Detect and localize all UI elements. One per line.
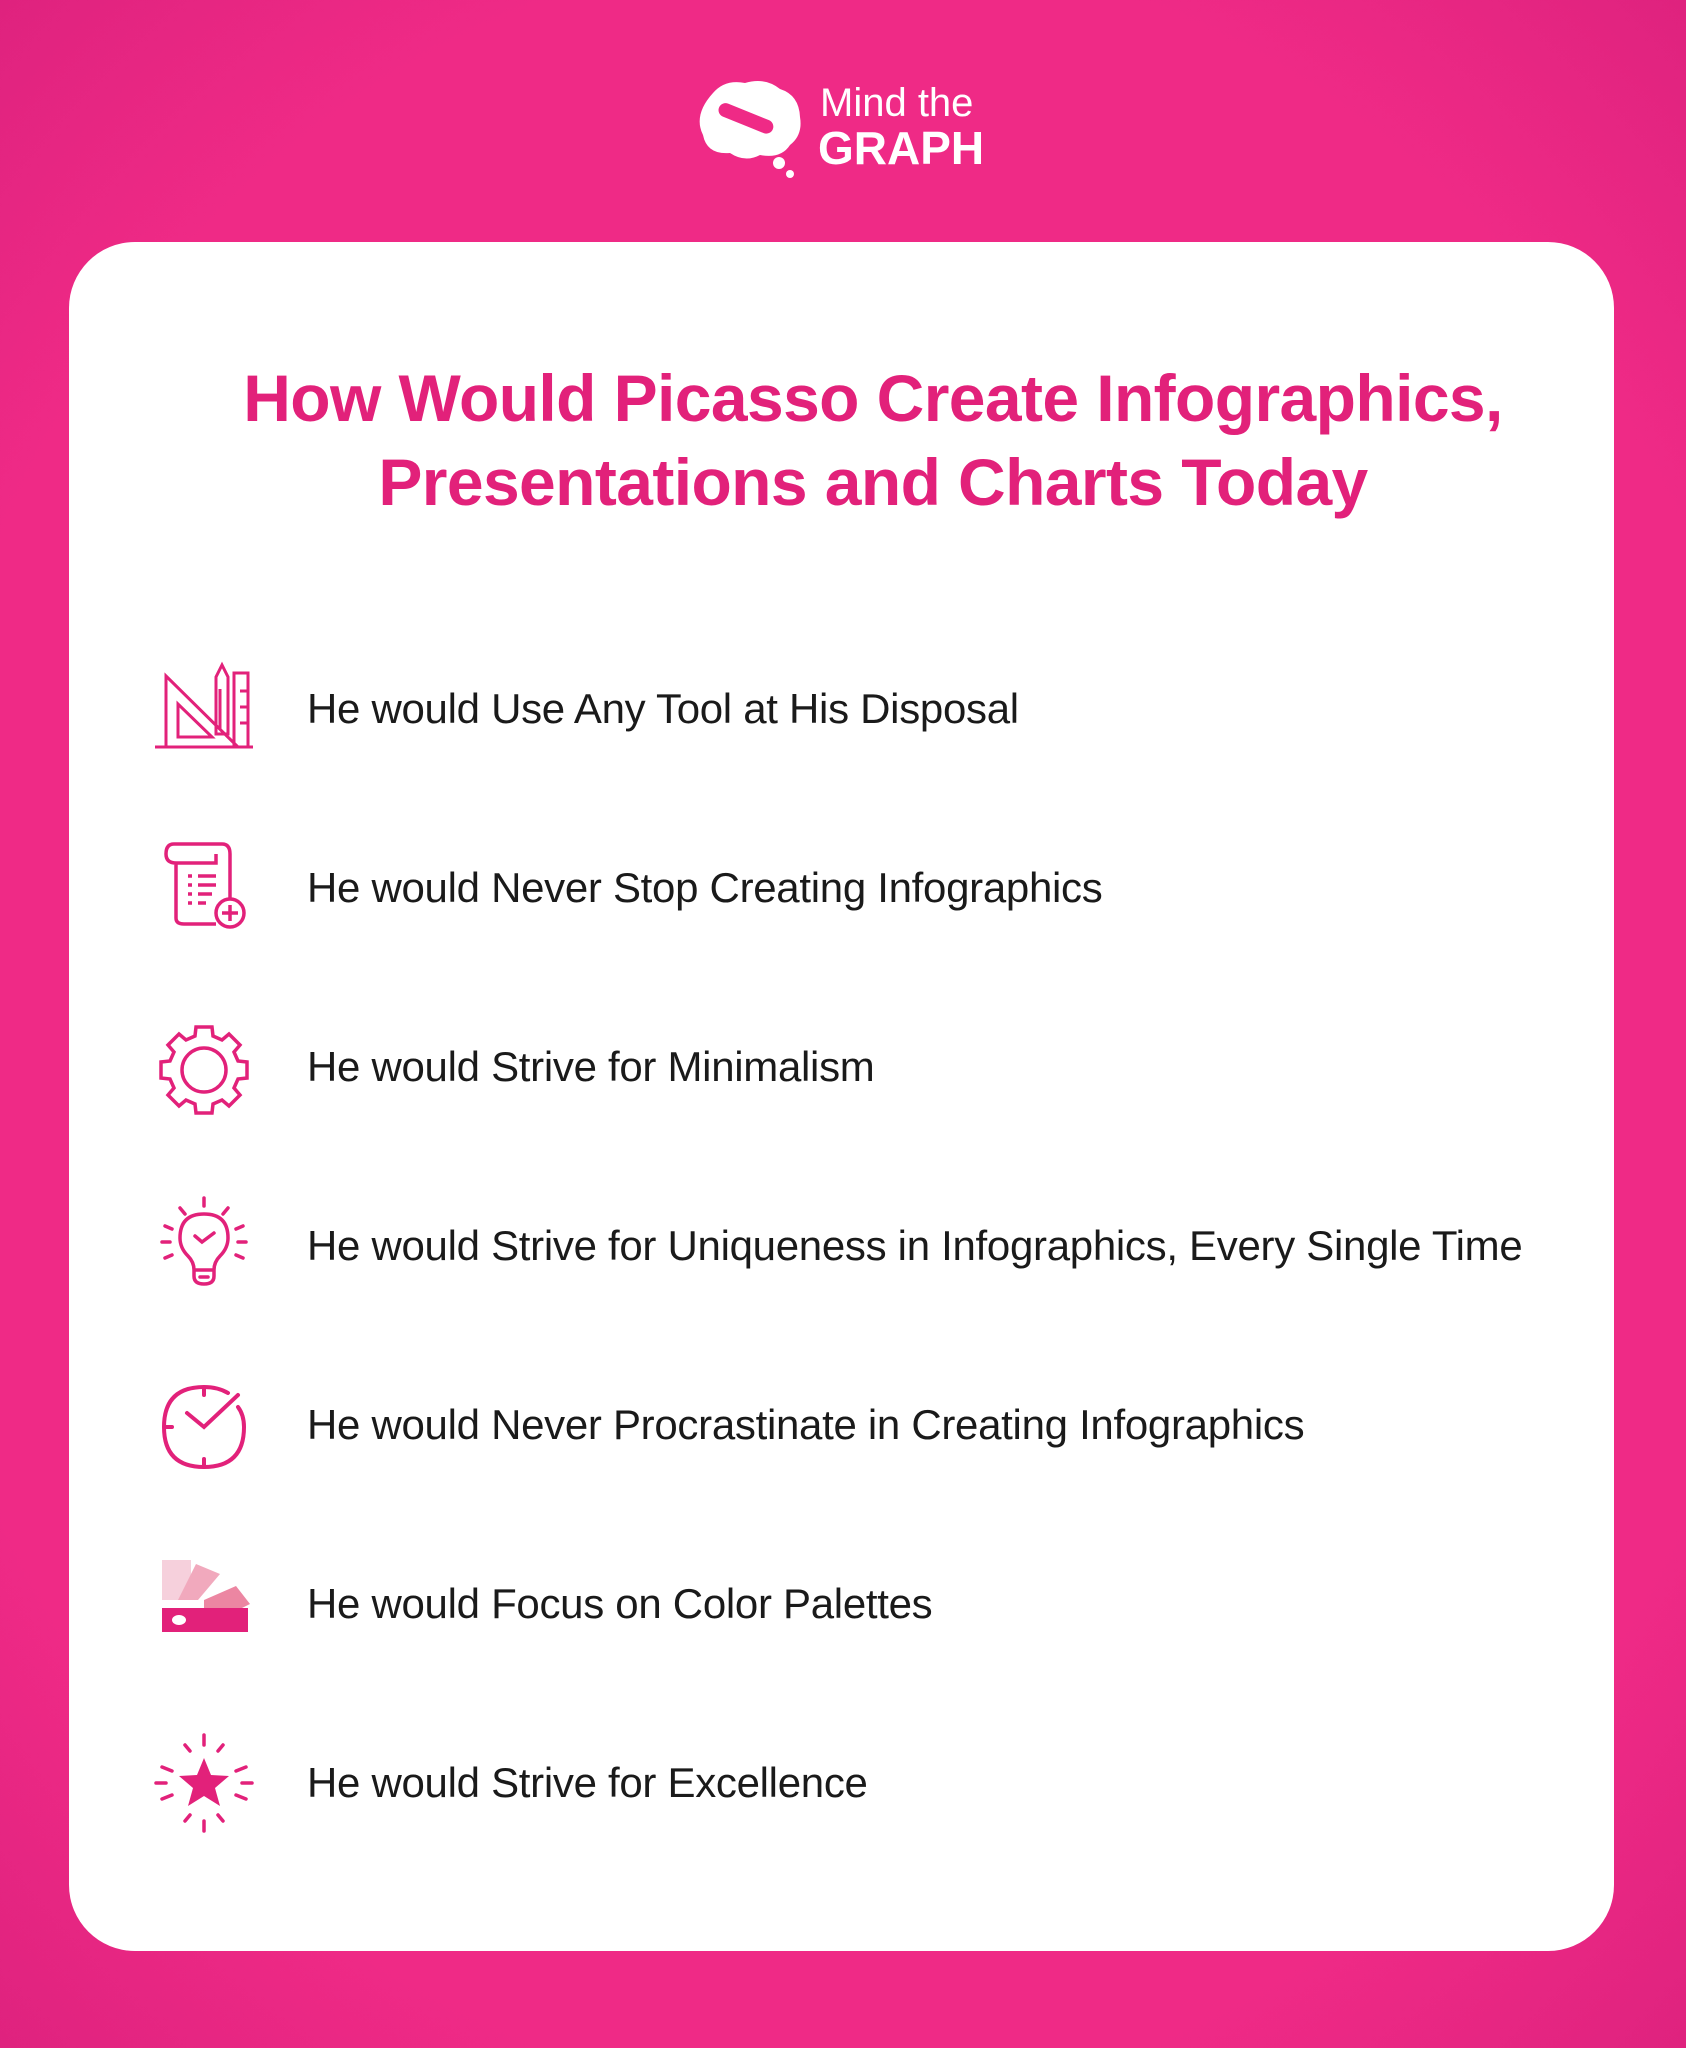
icon: color palette — [162, 1560, 250, 1632]
panel: card — [69, 242, 1614, 1951]
item 6: He would Focus on Color Palettes — [307, 1580, 932, 1627]
icon: star — [154, 1733, 254, 1833]
title: How Would Picasso Create Infographics, — [243, 361, 1503, 435]
item 5: He would Never Procrastinate in Creating Infographics — [307, 1401, 1304, 1448]
item 7 — [154, 1733, 868, 1833]
item 6 — [162, 1560, 932, 1632]
title: Presentations and Charts Today — [378, 445, 1368, 519]
item 3: He would Strive for Minimalism — [307, 1043, 874, 1090]
item 5 — [162, 1385, 1304, 1469]
list — [154, 662, 1522, 1833]
icon: clock check — [162, 1385, 246, 1469]
icon: brain — [700, 81, 801, 178]
logo — [700, 81, 984, 178]
item 1: He would Use Any Tool at His Disposal — [307, 685, 1019, 732]
item 2: He would Never Stop Creating Infographics — [307, 864, 1102, 911]
item 3 — [159, 1025, 874, 1115]
icon: gear — [159, 1025, 249, 1115]
title — [243, 361, 1503, 519]
item 1 — [155, 662, 1019, 748]
logo: GRAPH — [818, 122, 984, 174]
icon: bulb — [160, 1196, 248, 1286]
item 4 — [160, 1196, 1522, 1286]
item 4: He would Strive for Uniqueness in Infographics, Every Single Time — [307, 1222, 1522, 1269]
item 7: He would Strive for Excellence — [307, 1759, 868, 1806]
item 2 — [164, 842, 1102, 929]
logo text: Mind the — [820, 81, 973, 125]
icon: scroll — [164, 842, 246, 929]
icon: tools — [155, 662, 253, 748]
